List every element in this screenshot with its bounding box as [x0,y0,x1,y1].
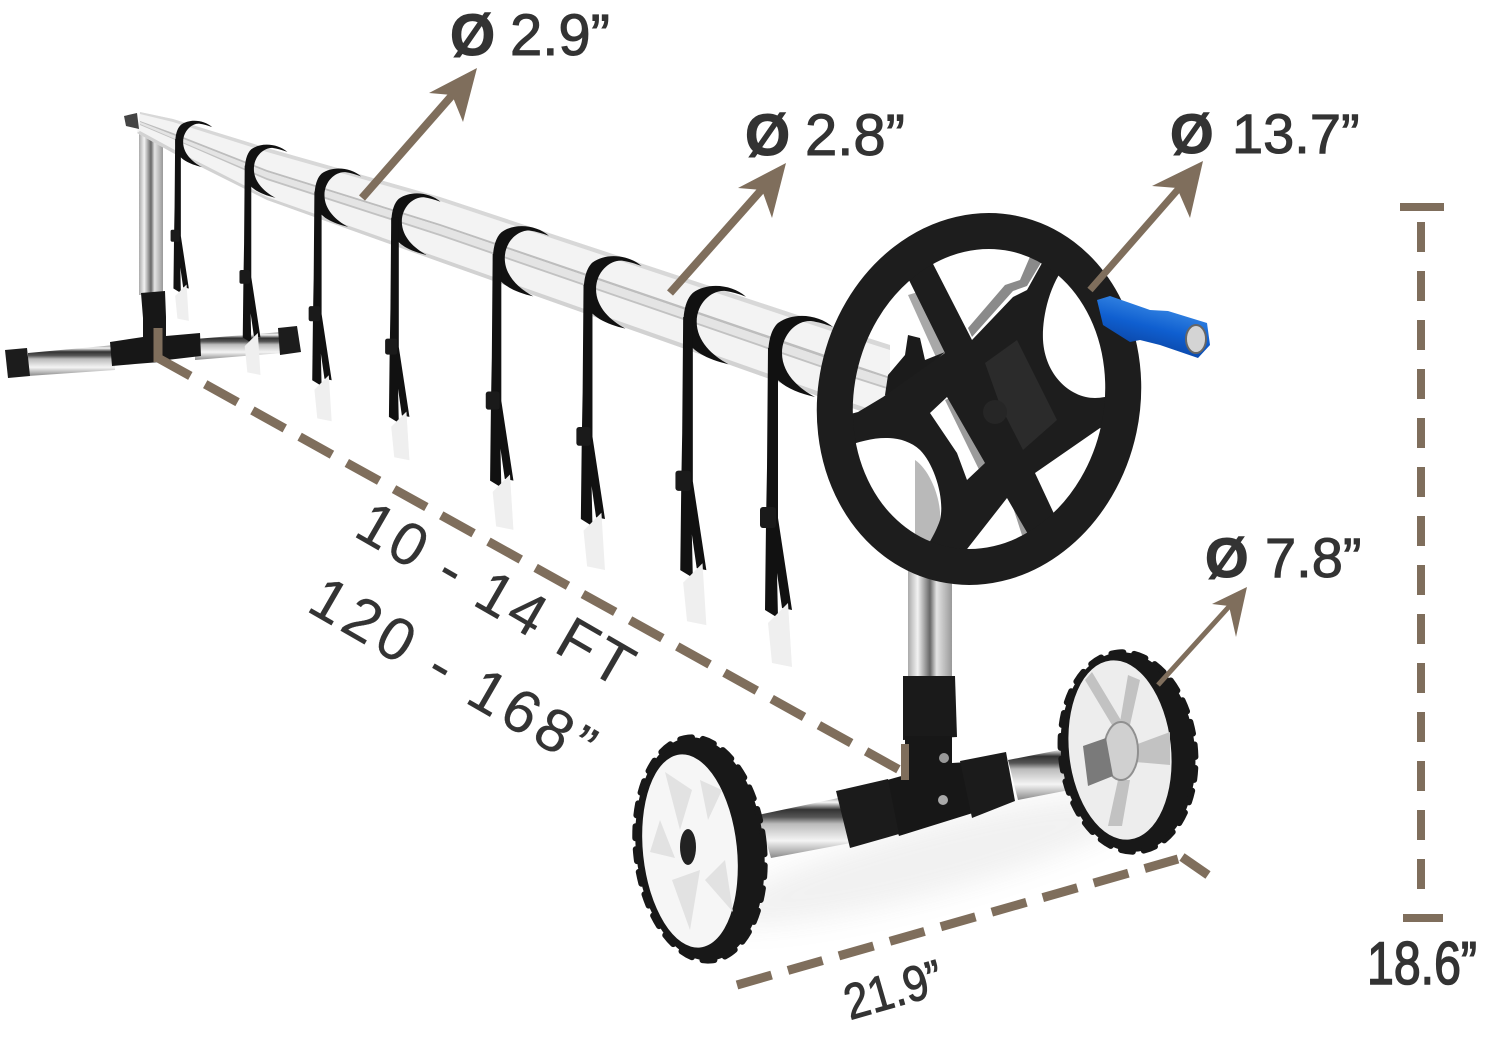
arrow: tube diameter 2.9 [362,68,477,198]
screw bottom [938,795,948,805]
label: 21.9 inch: 21.9” [838,949,949,1031]
label: 2.9 inch: Ø [450,3,495,68]
steel strip upper left [908,292,950,366]
strap 1 [171,121,212,321]
strap 6 [576,256,642,570]
T body [880,736,976,836]
right wheel [1051,646,1205,858]
right wheel tyre [1051,646,1205,858]
right axle steel [1008,744,1090,800]
length dimension line [158,328,905,780]
label: 2.8 inch: 2.8” [805,103,905,168]
arrow: wheel diameter [1158,587,1247,685]
wheel hub pocket [985,340,1057,450]
left wheel spokes [650,772,733,930]
ratchet [885,335,945,400]
left vertical post [139,130,163,295]
ground shadows [709,770,1151,950]
strap 7 [675,286,746,625]
label: length in inches: 120 - 168” [298,563,607,780]
wheel rim [804,204,1154,594]
label: 2.9 inch: 2.9” [510,3,610,68]
strap 4 [385,193,441,460]
strap 3 [309,168,361,421]
handwheel [816,213,1142,585]
tube bottom shading [137,131,890,421]
strap 8 [760,316,833,667]
arrow: handwheel diameter [1090,161,1203,290]
right wheel face [1060,655,1180,845]
tube groove band [140,121,890,379]
label: 7.8 inch: Ø [1205,526,1249,589]
label: 13.7 inch: 13.7” [1232,102,1360,165]
left support frame [5,130,301,378]
right horizontal steel bar [195,332,282,360]
left wheel hub [680,829,696,865]
strap 2 [239,145,287,375]
tube top shading [140,112,890,350]
label: 2.8 inch: Ø [745,103,790,168]
steel lower [1010,495,1040,560]
width dimension line [737,857,1208,985]
left wheel [625,731,775,967]
strap 5 [486,226,549,530]
aluminium roller tube [124,112,890,421]
right sleeve [960,752,1015,818]
right end cap [278,326,301,355]
arrow: tube diameter 2.8 [670,163,786,293]
left wheel face [633,750,747,952]
vertical sleeve [903,676,957,740]
hub knob [983,400,1007,424]
left end cap [5,348,30,378]
tube end plug [124,113,139,129]
blue handle [1097,296,1210,358]
left axle steel [758,796,856,858]
left wheel tyre [625,731,775,967]
front post and axle [758,570,1090,858]
straps [171,121,833,667]
left sleeve [836,779,899,848]
wheel spokes [852,264,1105,549]
handle end cap [1186,325,1206,353]
height dimension line [1400,207,1444,918]
left horizontal steel bar [28,345,115,376]
axle collar [1083,738,1113,786]
vertical steel post [908,570,952,680]
steel lower left [915,460,940,560]
label: length in feet: 10 - 14 FT [346,488,646,700]
screw top [939,753,949,763]
right wheel spokes [1085,672,1170,826]
steel parts behind handwheel [885,252,1045,560]
label: 7.8 inch: 7.8” [1265,526,1362,589]
T connector [110,291,201,366]
steel centre [945,395,1000,488]
steel strip top [968,252,1045,337]
right wheel hub [1104,722,1138,780]
label: 13.7 inch: Ø [1170,102,1214,165]
